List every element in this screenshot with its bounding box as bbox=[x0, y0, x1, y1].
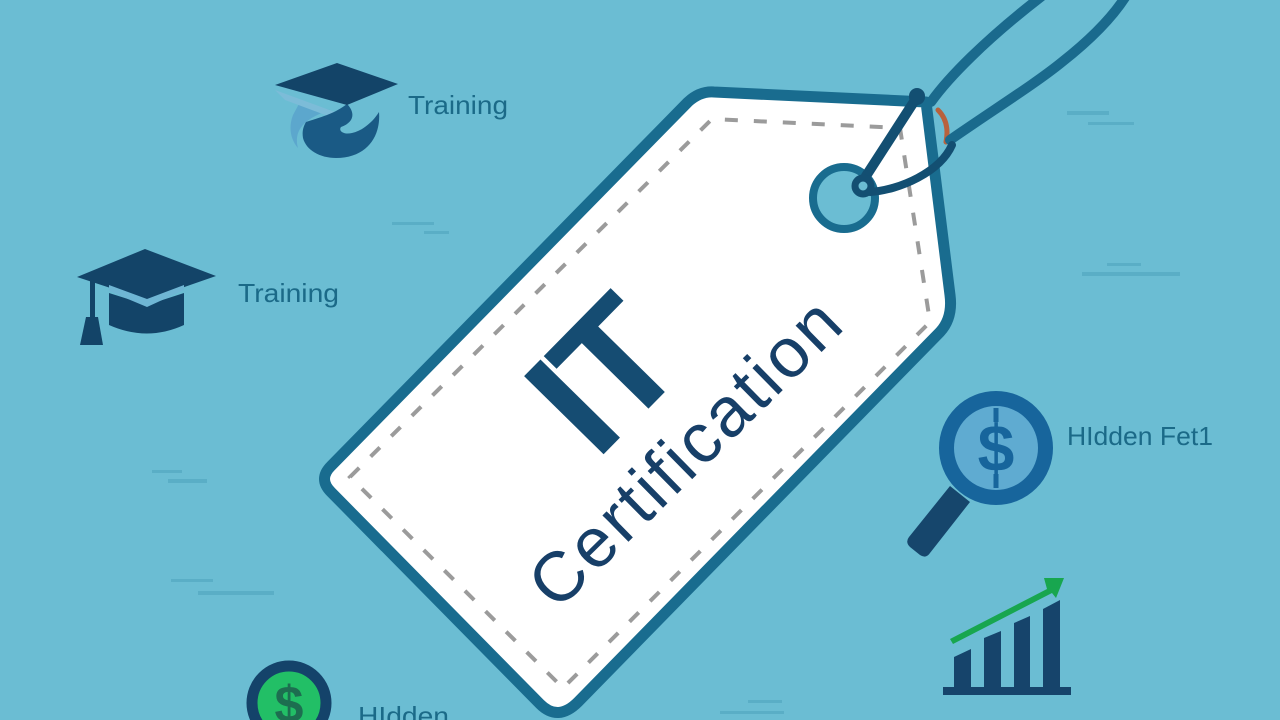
tag heading: Certification: Certification bbox=[513, 283, 856, 623]
stitched dashed border bbox=[350, 119, 930, 688]
icon: swirled graduation cap bbox=[275, 63, 398, 158]
string loop through eyelet bbox=[855, 96, 952, 194]
icon: graduation cap bbox=[77, 249, 216, 345]
icon: magnifier with dollar: $ bbox=[978, 411, 1014, 485]
label: Training (top): Training bbox=[408, 90, 508, 120]
tag eyelet bbox=[813, 167, 875, 229]
icon: magnifier with dollar bbox=[907, 398, 1046, 557]
price tag bbox=[324, 92, 951, 713]
string strands behind tag bbox=[931, 0, 1126, 142]
bar chart with rising arrow bbox=[943, 578, 1071, 695]
icon: green dollar coin bbox=[252, 666, 326, 720]
label: Hidden Fees: HIdden Fet1 bbox=[1067, 421, 1213, 451]
tag heading: IT: IT bbox=[492, 263, 716, 487]
label: Training (left): Training bbox=[238, 278, 339, 308]
